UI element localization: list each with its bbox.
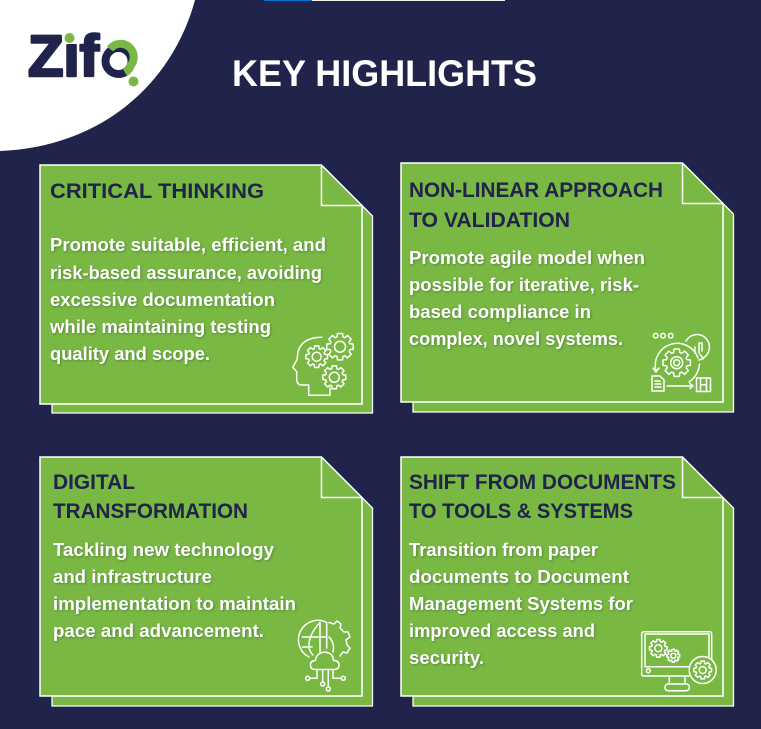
body text (49, 235, 326, 364)
heading (409, 471, 676, 523)
panel: non-linear approach (401, 163, 734, 412)
heading: DIGITAL (53, 471, 135, 494)
heading: TRANSFORMATION (53, 500, 248, 523)
heading (409, 179, 663, 232)
body text: documents to Document (409, 567, 629, 587)
body text: security. (409, 648, 484, 668)
body text (53, 540, 296, 641)
body text (409, 248, 645, 349)
panel: digital transformation (40, 457, 372, 706)
body text: excessive documentation (50, 290, 275, 310)
icon: head with gears (293, 333, 353, 395)
heading: TO TOOLS & SYSTEMS (409, 500, 633, 523)
body text: possible for iterative, risk- (409, 275, 639, 295)
body text (409, 540, 633, 668)
heading: NON-LINEAR APPROACH (409, 179, 663, 202)
title: KEY HIGHLIGHTS (232, 53, 537, 94)
body text: quality and scope. (50, 344, 210, 364)
body text: and infrastructure (53, 567, 212, 587)
icon: monitor with gears (642, 632, 716, 691)
heading: SHIFT FROM DOCUMENTS (409, 471, 676, 494)
panel: critical thinking (40, 165, 372, 413)
body text: improved access and (409, 621, 595, 641)
white corner shape (0, 0, 195, 151)
body text: risk-based assurance, avoiding (50, 263, 322, 283)
panel: shift from documents (401, 457, 734, 706)
body text: Transition from paper (409, 540, 598, 560)
body text: implementation to maintain (53, 594, 296, 614)
icon: iterative process (652, 333, 710, 392)
heading (53, 471, 248, 523)
logo: Zifo: Zif (28, 24, 100, 89)
body text: based compliance in (409, 302, 591, 322)
heading: TO VALIDATION (409, 209, 570, 232)
icon: globe, gear and cloud (298, 620, 350, 691)
heading: CRITICAL THINKING (50, 180, 264, 203)
body text: Tackling new technology (53, 540, 274, 560)
body text: complex, novel systems. (409, 329, 623, 349)
top strip (264, 0, 505, 1)
body text: Promote agile model when (409, 248, 645, 268)
body text: while maintaining testing (49, 317, 271, 337)
body text: pace and advancement. (53, 621, 264, 641)
logo: Zifo (28, 24, 138, 89)
body text: Promote suitable, efficient, and (50, 235, 326, 255)
body text: Management Systems for (409, 594, 633, 614)
